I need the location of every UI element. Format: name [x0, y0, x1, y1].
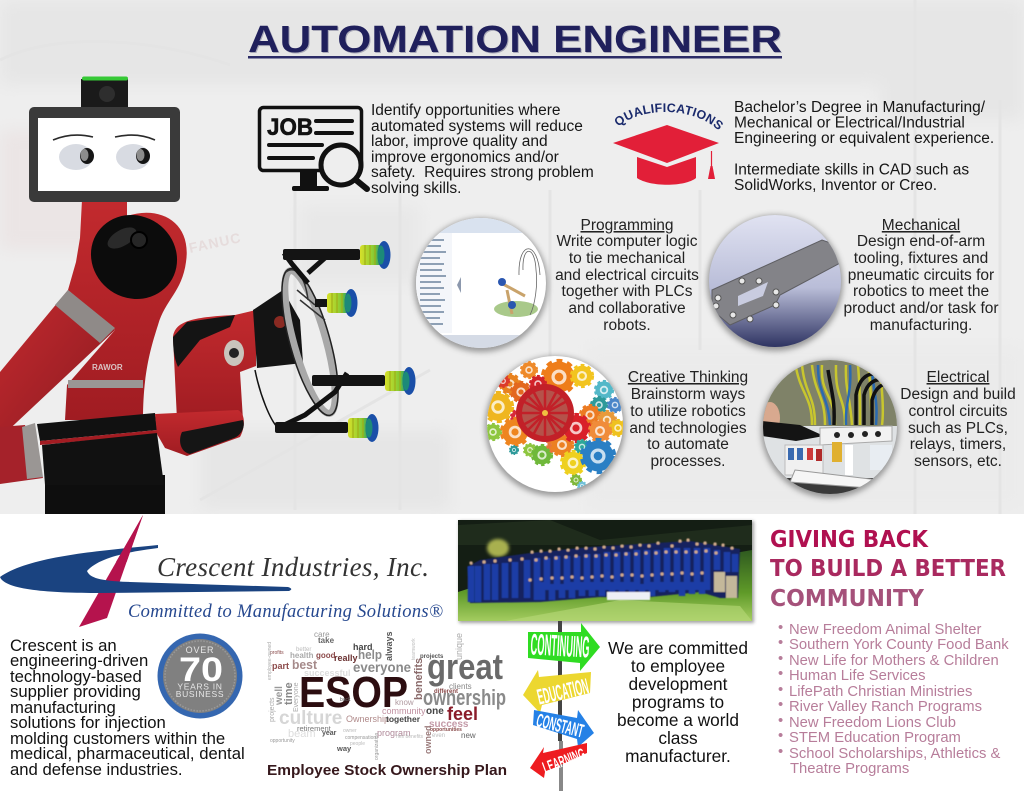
text: employee development: become a world	[617, 710, 739, 730]
text: mechanical: tooling, fixtures and	[854, 250, 988, 267]
icon: job search monitor	[260, 108, 367, 191]
arrow: constant	[533, 710, 594, 747]
word cloud: ESOP: organization	[374, 733, 380, 760]
word cloud: ESOP: new	[461, 731, 476, 740]
screen face	[29, 107, 180, 202]
text: electrical: Electrical	[927, 369, 989, 386]
text: CONTINUING	[530, 628, 590, 665]
arrow: education	[523, 670, 591, 713]
list: community programs: New Life for Mothers & Children	[789, 653, 999, 669]
background label: FANUC: FANUC	[187, 229, 243, 256]
text: creative thinking: to automate	[647, 436, 729, 453]
gripper hub and tooling	[253, 249, 385, 433]
word cloud: ESOP: unique	[454, 633, 464, 660]
text: mechanical: manufacturing.	[870, 317, 972, 334]
logo: Crescent Industries: Committed to Manufacturing Solutions®	[128, 602, 443, 622]
badge: over 70 years: OVER	[186, 645, 214, 655]
text: job description: automated systems will reduce	[371, 118, 583, 135]
text: programming: and electrical circuits	[555, 267, 699, 284]
badge: over 70 years	[158, 634, 242, 718]
circle: electrical panel	[760, 360, 899, 498]
list: community programs: STEM Education Program	[789, 730, 961, 746]
arrow: continuing	[528, 623, 600, 671]
shoulder black ball	[74, 198, 194, 316]
robot body and neck	[65, 200, 187, 420]
text: programming: robots.	[603, 317, 651, 334]
word cloud: ESOP: way	[336, 744, 352, 753]
robot photo	[0, 76, 416, 514]
word cloud: ESOP: year	[322, 730, 337, 737]
text: employee development: development	[629, 674, 728, 694]
word cloud: ESOP	[267, 630, 506, 760]
robot upper arm	[0, 290, 115, 438]
elbow joint	[173, 310, 256, 420]
sensor head	[81, 79, 128, 109]
word cloud: ESOP: benefits	[413, 658, 425, 700]
arrow: constant: CONSTANT	[534, 710, 586, 743]
word cloud: ESOP: time	[283, 682, 295, 705]
text: programming	[555, 217, 699, 334]
list: community programs: New Freedom Animal Shelter	[789, 622, 982, 638]
text: company description: Crescent is an	[10, 636, 117, 655]
text: programming: together with PLCs	[562, 283, 693, 300]
text: programming: Programming	[580, 217, 674, 234]
word cloud: ESOP: ownership	[423, 685, 506, 710]
text: electrical: sensors, etc.	[914, 453, 1002, 470]
word cloud: ESOP: everyone	[353, 659, 411, 675]
word cloud: ESOP: Everyone	[293, 682, 300, 712]
word cloud: ESOP: owner	[343, 728, 357, 734]
word cloud: ESOP: hes benefits	[396, 734, 423, 740]
text: mechanical: Design end-of-arm	[857, 233, 985, 250]
list: community programs: •	[778, 728, 783, 744]
text: job description: solving skills.	[371, 180, 461, 197]
text: company description: molding customers within the	[10, 729, 225, 748]
word cloud: ESOP: opportunity	[270, 738, 295, 744]
word cloud: ESOP: program	[377, 728, 411, 738]
icon: job search monitor: JOB	[267, 114, 313, 141]
word cloud: ESOP: always	[384, 631, 394, 661]
word cloud: ESOP: feel	[447, 704, 478, 724]
word cloud: ESOP: profits	[270, 650, 284, 656]
circle: mechanical CAD	[707, 214, 843, 351]
word cloud: ESOP: help	[358, 647, 382, 662]
word cloud: ESOP: retirement	[297, 724, 332, 733]
text: qualifications: Mechanical or Electrical/Industrial	[734, 114, 965, 132]
text: mechanical: Mechanical	[882, 217, 960, 234]
text: electrical: such as PLCs,	[908, 420, 1008, 437]
logo: Crescent Industries: Crescent Industries, Inc.	[157, 552, 429, 582]
icon: qualifications cap: QUALIFICATIONS	[615, 103, 723, 130]
list: community programs: •	[778, 635, 783, 651]
list: community programs: •	[778, 651, 783, 667]
text: company description: engineering-driven	[10, 651, 148, 670]
arm grey band	[55, 290, 115, 343]
word cloud: ESOP: back	[340, 697, 351, 703]
logo: Crescent Industries	[0, 515, 443, 627]
word cloud: ESOP: ESOP	[299, 668, 408, 717]
text: employee development: We are committed	[608, 638, 748, 658]
text: creative thinking: to utilize robotics	[630, 403, 746, 420]
text: employee development: programs to	[632, 692, 724, 712]
text: company description: manufacturing	[10, 698, 116, 717]
text: programming: to tie mechanical	[569, 250, 685, 267]
text: creative thinking: processes.	[651, 453, 725, 470]
text: programming: Write computer logic	[557, 233, 698, 250]
word cloud: ESOP: really	[334, 653, 358, 663]
text: company description	[10, 636, 245, 779]
text: job description: labor, improve quality and	[371, 133, 548, 150]
circle: creative gears brain	[484, 356, 626, 496]
list: community programs: •	[778, 744, 783, 760]
employee crowd	[467, 540, 740, 603]
arrow: learning: LEARNING	[541, 746, 588, 777]
word cloud: ESOP: teamwork	[411, 638, 417, 660]
badge: over 70 years: YEARS IN	[177, 682, 223, 692]
word cloud: ESOP: Ownership	[346, 714, 389, 724]
caption: employee stock ownership plan: Employee Stock Ownership Plan	[267, 762, 507, 779]
word cloud: ESOP: community	[382, 706, 426, 716]
photo: employees group	[458, 520, 752, 622]
robot pedestal	[45, 475, 165, 514]
text: employee development: manufacturer.	[625, 746, 731, 766]
text: electrical: control circuits	[908, 403, 1008, 420]
badge: over 70 years: 70	[179, 651, 223, 689]
title: AUTOMATION ENGINEER	[249, 20, 783, 62]
word cloud: ESOP: care	[314, 630, 330, 639]
text: qualifications	[734, 99, 994, 194]
word cloud: ESOP: projects	[269, 697, 276, 722]
text: company description: solutions for injection	[10, 713, 166, 732]
text: employee development: to employee	[631, 656, 725, 676]
suction cup 4	[348, 414, 378, 442]
suction cup 3	[385, 367, 416, 395]
text: company description: technology-based	[10, 667, 142, 686]
text: electrical	[900, 369, 1016, 470]
text: company description: and defense industries.	[10, 760, 183, 779]
list: community programs: LifePath Christian Ministries	[789, 684, 972, 700]
text: qualifications: SolidWorks, Inventor or Creo.	[734, 177, 937, 194]
text: qualifications: Bachelor’s Degree in Manufacturing/	[734, 99, 986, 116]
list: community programs: •	[778, 620, 783, 636]
list: community programs: •	[778, 666, 783, 682]
text: job description: safety. Requires strong problem	[371, 164, 594, 181]
word cloud: ESOP: part	[272, 661, 289, 671]
word cloud: ESOP: owned	[423, 726, 433, 754]
list: community programs: River Valley Ranch Programs	[789, 699, 982, 715]
badge: over 70 years: BUSINESS	[176, 689, 224, 699]
word cloud: ESOP: take	[318, 636, 335, 645]
robot photo: RAWOR	[92, 363, 123, 372]
suction cup 2	[327, 289, 358, 317]
photo frame shadow	[459, 521, 754, 623]
icon: qualifications cap	[613, 103, 723, 185]
word cloud: ESOP: hard	[353, 642, 373, 652]
word cloud: ESOP: even	[432, 733, 445, 739]
circle: programming screenshot	[414, 218, 548, 352]
text: creative thinking: and technologies	[629, 420, 747, 437]
word cloud: ESOP: projects	[420, 654, 444, 660]
word cloud: ESOP: health	[290, 651, 314, 660]
list: community programs: Theatre Programs	[790, 761, 909, 777]
list: community programs: Southern York County Food Bank	[789, 637, 1009, 653]
heading: giving back: TO BUILD A BETTER	[770, 556, 1006, 582]
word cloud: ESOP: beam	[288, 728, 316, 740]
word cloud: ESOP: culture	[279, 708, 342, 729]
word cloud: ESOP: employee-owned	[267, 642, 273, 680]
word cloud: ESOP: compensation	[345, 735, 376, 741]
word cloud: ESOP: success	[429, 719, 469, 730]
word cloud: ESOP: opportunities	[430, 727, 462, 733]
word cloud: ESOP: different	[434, 689, 458, 695]
text: mechanical	[843, 217, 999, 334]
text: company description: supplier providing	[10, 682, 141, 701]
word cloud: ESOP: great	[427, 646, 503, 687]
text: qualifications: Intermediate skills in CAD such as	[734, 162, 969, 178]
text: programming: and collaborative	[568, 300, 686, 317]
arrow: learning	[530, 743, 588, 778]
text: employee development	[608, 638, 748, 766]
list: community programs: •	[778, 697, 783, 713]
word cloud: ESOP: people	[350, 741, 365, 747]
word cloud: ESOP: one	[426, 706, 444, 717]
word cloud: ESOP: best	[292, 657, 318, 672]
text: creative thinking: Creative Thinking	[628, 369, 748, 386]
text: creative thinking: Brainstorm ways	[631, 386, 746, 403]
word cloud: ESOP: well	[274, 686, 285, 706]
word cloud: ESOP: clients	[449, 682, 472, 691]
text: EDUCATION	[535, 673, 591, 710]
text: job description	[371, 102, 594, 197]
word cloud: ESOP: together	[386, 714, 421, 724]
list: community programs: School Scholarships, Athletics &	[789, 746, 1001, 762]
heading: giving back	[770, 527, 1006, 612]
text: electrical: Design and build	[900, 386, 1016, 403]
word cloud: ESOP: successful	[304, 668, 351, 678]
word cloud: ESOP: know	[395, 698, 414, 707]
list: community programs	[778, 620, 1009, 777]
text: mechanical: product and/or task for	[843, 300, 999, 317]
forearm	[0, 410, 244, 485]
text: mechanical: pneumatic circuits for	[848, 267, 994, 284]
text: company description: medical, pharmaceutical, dental	[10, 744, 245, 763]
heading: giving back: GIVING BACK	[770, 527, 929, 553]
background: factory photo	[0, 0, 1024, 515]
list: community programs: New Freedom Lions Club	[789, 715, 956, 731]
text: mechanical: robotics to meet the	[853, 283, 989, 300]
word cloud: ESOP: better	[296, 647, 311, 653]
text: creative thinking	[628, 369, 748, 470]
heading: giving back: COMMUNITY	[770, 586, 924, 612]
text: qualifications: Engineering or equivalent experience.	[734, 130, 994, 147]
lower white band	[0, 514, 1024, 791]
suction cup 1	[360, 241, 390, 269]
word cloud: ESOP: good	[316, 651, 336, 660]
list: community programs: Human Life Services	[789, 668, 926, 684]
text: electrical: relays, timers,	[910, 436, 1006, 453]
text: employee development: class	[658, 728, 698, 748]
text: job description: improve ergonomics and/or	[371, 149, 559, 166]
title: AUTOMATION ENGINEER	[248, 19, 782, 61]
signpost arrows	[523, 621, 600, 791]
text: job description: Identify opportunities where	[371, 102, 561, 119]
list: community programs: •	[778, 682, 783, 698]
list: community programs: •	[778, 713, 783, 729]
